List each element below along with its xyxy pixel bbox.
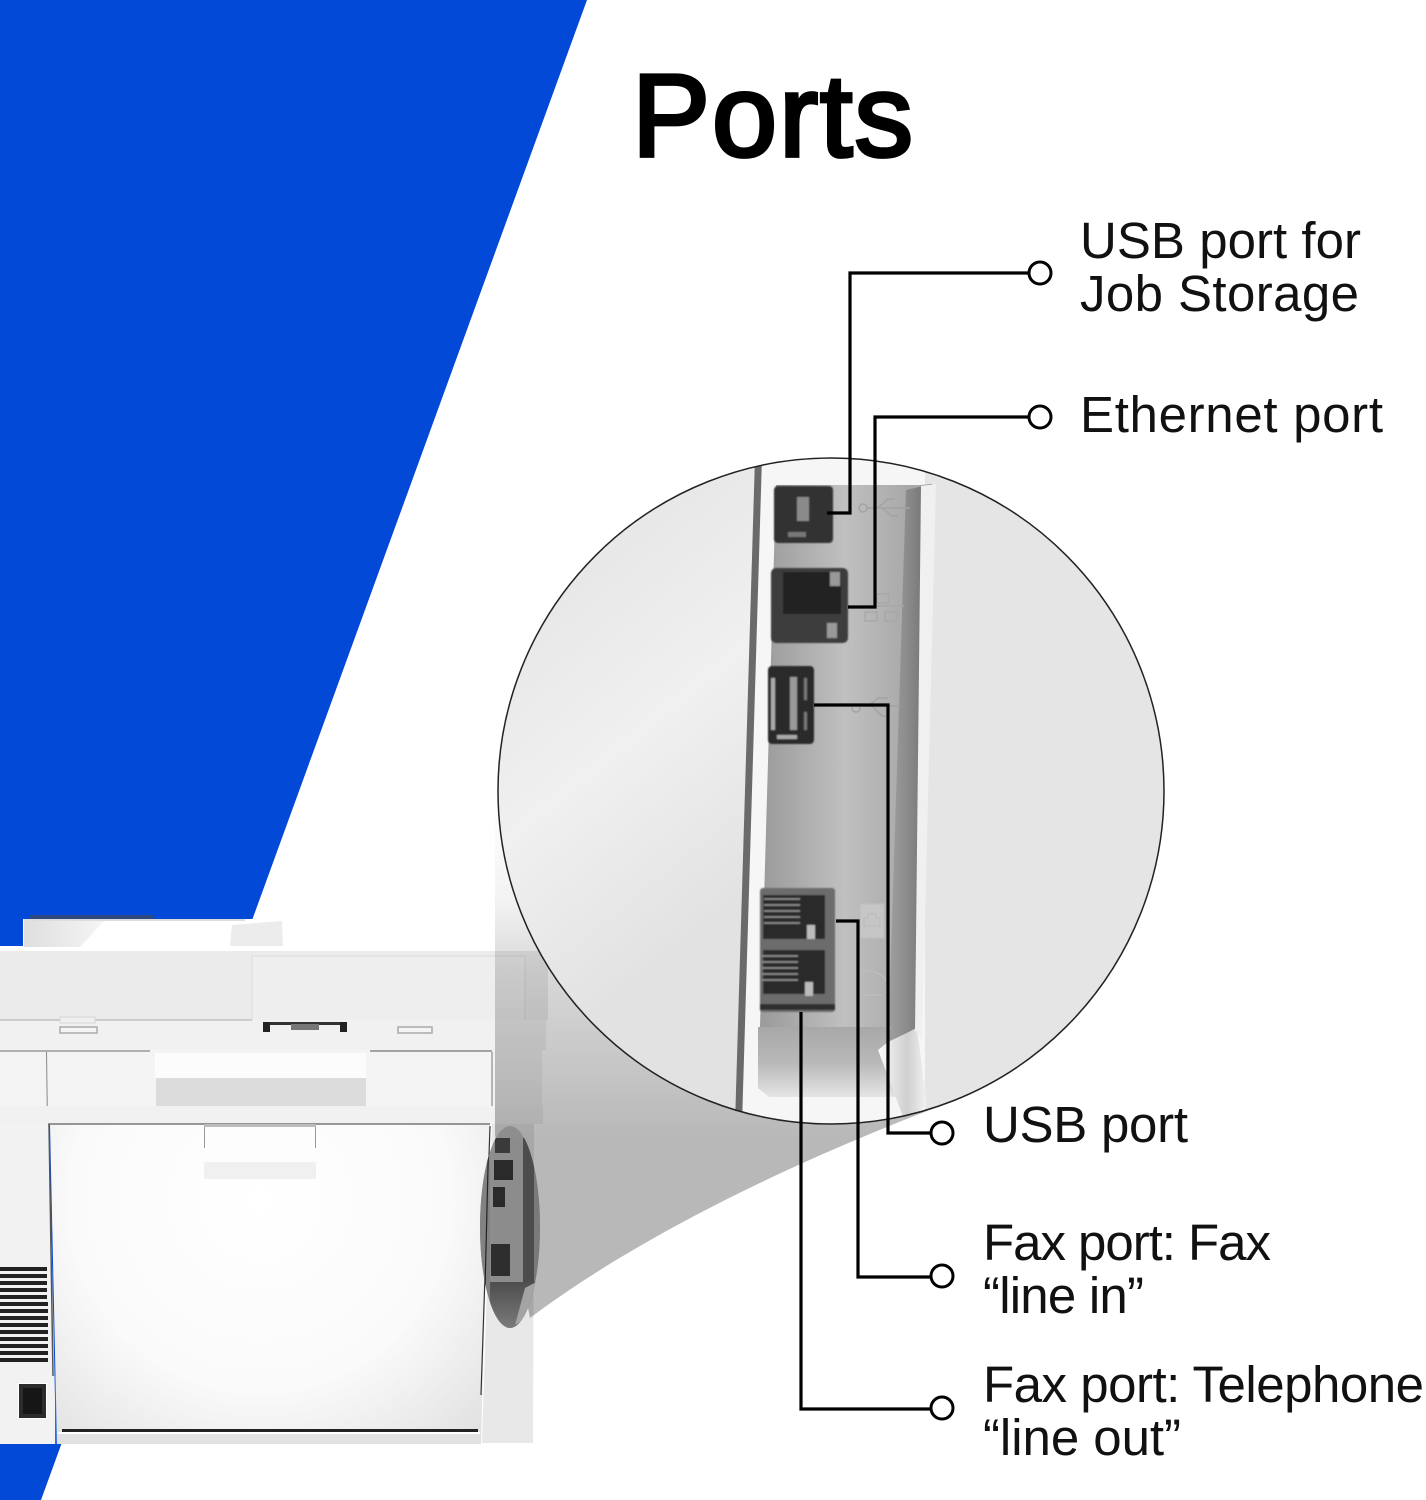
magnifier cone shadow bbox=[495, 800, 935, 1318]
circle left housing bbox=[497, 457, 759, 1124]
callout: Ethernet port bbox=[848, 386, 1383, 607]
printer body upper bbox=[0, 951, 548, 1050]
callout: Ethernet port: Ethernet port bbox=[1080, 386, 1383, 443]
USB-A port bbox=[768, 666, 814, 744]
fax line symbols bbox=[860, 904, 886, 996]
scanner top bbox=[0, 915, 548, 952]
blue diagonal background bbox=[0, 0, 587, 1500]
USB-B port bbox=[774, 486, 833, 543]
recessed port panel bbox=[758, 484, 936, 1122]
callout: fax line in: Fax port: Fax bbox=[983, 1214, 1271, 1271]
left rear column bbox=[0, 1124, 57, 1444]
rear latch bbox=[263, 1022, 347, 1032]
network symbol bbox=[862, 594, 904, 621]
callout: USB port for job storage: USB port for bbox=[1080, 212, 1361, 269]
callout: fax line in bbox=[836, 921, 1271, 1324]
Ethernet port bbox=[771, 568, 848, 643]
callout: fax telephone line out bbox=[801, 1012, 1424, 1466]
printer rear view bbox=[0, 915, 548, 1444]
callout: USB port: USB port bbox=[983, 1096, 1188, 1153]
title: Ports bbox=[632, 50, 913, 181]
circle outline bbox=[498, 458, 1164, 1124]
magnified circle view bbox=[497, 457, 1165, 1124]
callout: fax telephone line out: “line out” bbox=[983, 1409, 1181, 1466]
callout: USB port bbox=[814, 705, 1188, 1153]
ventilation slots bbox=[0, 1267, 48, 1362]
power socket bbox=[18, 1383, 47, 1419]
seam and white strip bbox=[735, 457, 925, 1124]
callout: fax telephone line out: Fax port: Telephone bbox=[983, 1356, 1424, 1413]
rear door bbox=[48, 1124, 490, 1444]
circle right housing bbox=[925, 457, 1165, 1124]
callout: USB port for job storage bbox=[827, 212, 1361, 513]
printer body middle bbox=[0, 1050, 543, 1124]
USB symbols bbox=[852, 499, 910, 716]
callout: fax line in: “line in” bbox=[983, 1267, 1144, 1324]
RJ11 fax ports bbox=[760, 888, 835, 1012]
right side of printer bbox=[481, 1124, 534, 1443]
callout: USB port for job storage: Job Storage bbox=[1080, 265, 1359, 322]
small magnified port area bbox=[480, 1126, 540, 1330]
